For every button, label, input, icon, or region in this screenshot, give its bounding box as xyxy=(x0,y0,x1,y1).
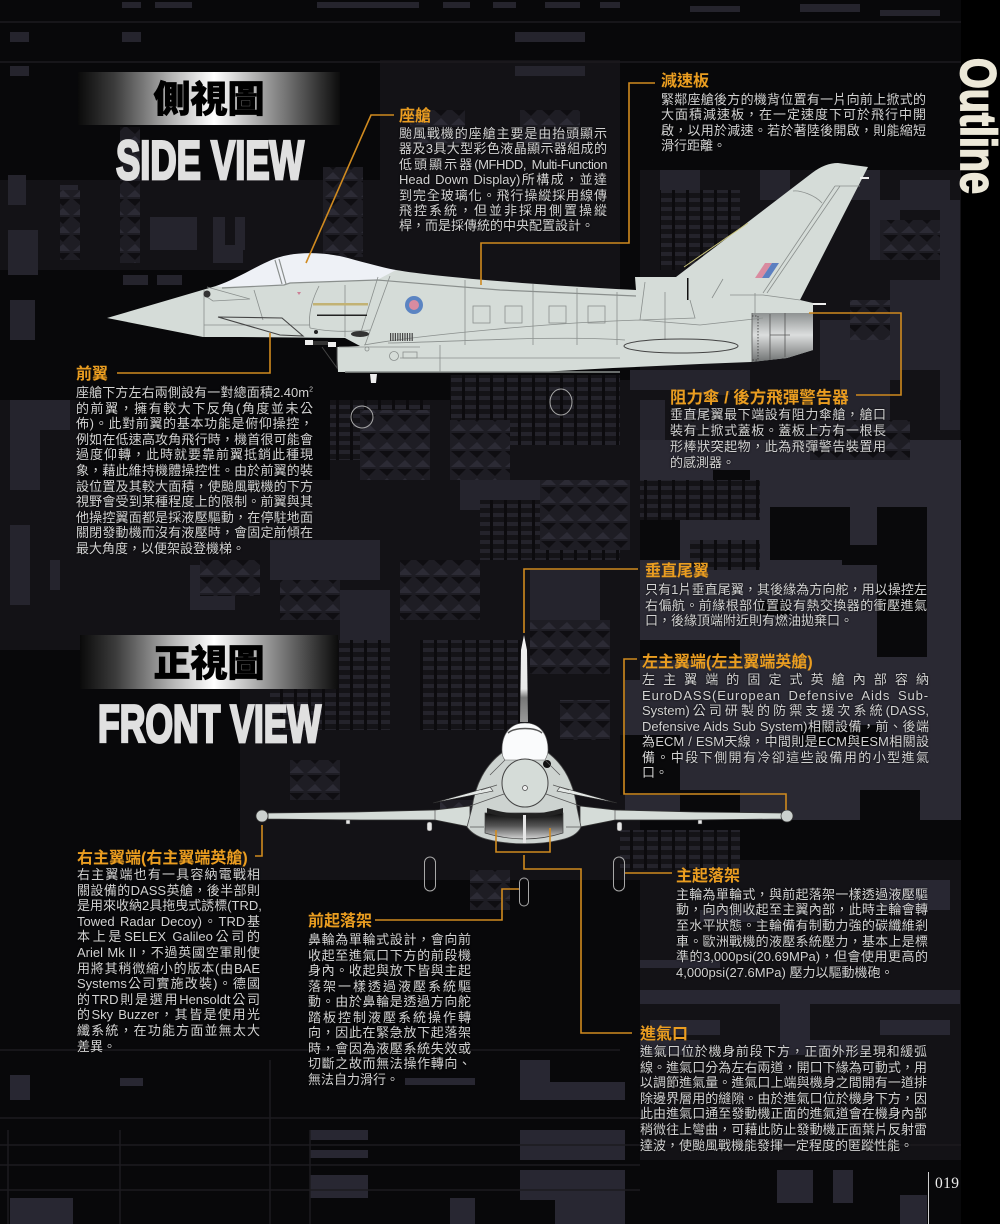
front view chinese title: 正視圖 xyxy=(154,633,264,687)
intake xyxy=(485,808,563,843)
text: cockpit: Head Down Display)所構成，並達 xyxy=(399,172,607,187)
text: cockpit: 桿，而是採傳統的中央配置設計。 xyxy=(399,218,594,233)
text: nose gear: 鼻輪為單輪式設計，會向前 xyxy=(308,932,471,947)
text: cockpit: 低頭顯示器(MFHDD, Multi-Function xyxy=(399,157,607,172)
side view title banner xyxy=(82,72,338,191)
text: main gear: 4,000psi(27.6MPa) 壓力以驅動機砲。 xyxy=(676,965,893,980)
panel: canard xyxy=(76,365,313,556)
text: canard: 例如在低速高攻角飛行時，機首很可能會 xyxy=(76,432,313,447)
text: nose gear: 收起至進氣口下方的前段機 xyxy=(308,948,471,962)
text: right wing tip: 差異。 xyxy=(77,1039,116,1054)
text: intake: 稍微往上彎曲，可藉此防止發動機正面葉片反射雷 xyxy=(640,1122,927,1137)
fin flash xyxy=(755,263,779,278)
side view english title: SIDE VIEW xyxy=(116,129,304,191)
text: main gear: 主輪為單輪式，與前起落架一樣透過液壓驅 xyxy=(676,886,928,902)
front view jet illustration xyxy=(256,635,793,844)
text: left wing tip: 備。中段下側開有冷卻這些設備用的小型進氣 xyxy=(642,750,929,764)
text: intake: 線。進氣口分為左右兩道，開口下緣為可動式，用 xyxy=(640,1060,927,1075)
leader: drag chute xyxy=(809,313,901,395)
panel: airbrake xyxy=(661,72,926,153)
text: main gear: 準的3,000psi(20.69MPa)，但會使用更高的 xyxy=(676,949,928,964)
text: vertical fin xyxy=(645,582,927,628)
text: main gear: 至水平狀態。主輪備有制動力強的碳纖維剎 xyxy=(676,918,928,933)
leader: right wing tip xyxy=(255,825,262,856)
fuselage and fin xyxy=(107,163,868,372)
text: canard: 視野會受到某種程度上的限制。前翼與其 xyxy=(76,494,313,509)
text: intake: 進氣口位於機身前段下方，正面外形呈現和緩弧 xyxy=(640,1044,927,1059)
text: right wing tip: 的TRD則是選用Hensoldt公司 xyxy=(77,992,260,1007)
heading: main gear: 主起落架 xyxy=(676,868,740,885)
text: canard: 關閉發動機而沒有液壓時，會固定前傾在 xyxy=(76,525,313,540)
text: intake: 達波，使颱風戰機能發揮一定程度的匿蹤性能。 xyxy=(640,1138,913,1153)
text: nose gear: 時，會因為液壓系統失效或 xyxy=(308,1040,471,1056)
pylons xyxy=(346,820,702,831)
page number: 019 xyxy=(935,1175,959,1192)
text: nose gear: 無法自力滑行。 xyxy=(308,1072,399,1086)
leader: main gear xyxy=(625,872,672,874)
text: canard: 設位置及其較大面積，使颱風戰機的下方 xyxy=(76,479,313,494)
heading: cockpit: 座艙 xyxy=(399,108,431,125)
leader: intake bracket xyxy=(496,828,550,852)
text: drag chute: 的感測器。 xyxy=(670,455,735,470)
text: right wing tip xyxy=(77,867,262,1054)
text: nose gear: 身內。收起與放下皆與主起 xyxy=(308,963,471,978)
left wing xyxy=(268,806,470,827)
text: airbrake: 滑行距離。 xyxy=(661,138,726,153)
text: canard: 過度仰轉，此時就要靠前翼抵銷此種現 xyxy=(76,447,313,462)
leader: canopy xyxy=(306,115,394,263)
text: nose gear: 向，因此在緊急放下起落架 xyxy=(308,1025,471,1040)
text: nose gear: 落架一樣透過液壓系統驅 xyxy=(308,978,471,994)
right wing xyxy=(580,806,782,827)
text: main gear: 動，向內側收起至主翼內部，此時主輪會轉 xyxy=(676,902,928,917)
text: left wing tip: EuroDASS(European Defensive Aids Sub- xyxy=(642,688,929,702)
panel: left wing tip xyxy=(642,653,929,780)
heading: nose gear: 前起落架 xyxy=(308,913,372,930)
text: right wing tip: 關設備的DASS英艙，後半部則 xyxy=(77,883,260,898)
leader: intake xyxy=(524,855,632,1033)
fuselage front xyxy=(467,752,581,844)
text: vertical fin: 右偏航。前緣根部位置設有熱交換器的衝壓進氣 xyxy=(645,598,927,612)
text: drag chute xyxy=(670,407,886,470)
lower blocks xyxy=(10,880,960,1224)
heading: canard: 前翼 xyxy=(76,366,108,383)
text: intake: 除邊界層用的縫隙。由於進氣口位於機身下方，因 xyxy=(640,1091,927,1106)
wing tip pods xyxy=(256,810,793,822)
right mid gray field xyxy=(625,440,961,820)
heading: airbrake: 減速板 xyxy=(661,73,709,90)
text: right wing tip: 用將其稍微縮小的版本(由BAE xyxy=(77,961,260,976)
panel: drag chute and missile warner xyxy=(670,388,886,470)
text: canard: 的前翼，擁有較大下反角(角度並未公 xyxy=(76,401,313,416)
panel: cockpit xyxy=(399,107,607,233)
text: left wing tip: 口。 xyxy=(642,765,668,780)
heading: right wing tip: 右主翼端(右主翼端英艙) xyxy=(77,850,248,867)
text: intake: 此由進氣口通至發動機正面的進氣道會在機身內部 xyxy=(640,1106,927,1121)
text: right wing tip: Systems公司實施改裝)。德國 xyxy=(77,976,260,991)
text: right wing tip: 纖系統，在功能方面並無太大 xyxy=(77,1023,260,1038)
text: left wing tip: 為ECM / ESM天線，中間則是ECM與ESM相關設 xyxy=(642,734,929,749)
text: right wing tip: Ariel Mk II，不過英國空軍則使 xyxy=(77,945,260,960)
leader: vertical fin xyxy=(524,569,638,633)
panel: intake xyxy=(640,1025,927,1153)
panel: nose gear xyxy=(308,912,471,1086)
text: cockpit xyxy=(399,126,607,233)
text: canard xyxy=(76,385,313,556)
text: nose gear: 踏板控制液壓系統操作轉 xyxy=(308,1010,471,1024)
leader: left wing tip xyxy=(624,659,786,810)
text: nose gear xyxy=(308,932,471,1086)
roundel xyxy=(405,296,423,314)
panel: main gear xyxy=(676,867,928,980)
text: right wing tip: 是用來收納2具拖曳式誘標(TRD, xyxy=(77,898,262,913)
text: canard: 佈)。此對前翼的基本功能是俯仰操控， xyxy=(76,416,313,431)
fuselage markings xyxy=(204,177,869,383)
leader: nose gear xyxy=(375,889,519,920)
text: nose gear: 切斷之故而無法操作轉向、 xyxy=(308,1056,471,1071)
text: canard: 座艙下方左右兩側設有一對總面積2.40m2 xyxy=(76,385,313,400)
text: right wing tip: Towed Radar Decoy)。TRD基 xyxy=(77,914,260,929)
side view chinese title: 側視圖 xyxy=(154,69,264,123)
text: cockpit: 到完全玻璃化。飛行操縱採用線傳 xyxy=(399,188,607,203)
heading: drag chute: 阻力傘 / 後方飛彈警告器 xyxy=(670,389,849,407)
canopy xyxy=(502,723,548,760)
text: main gear: 車。歐洲戰機的液壓系統壓力，基本上是標 xyxy=(676,934,928,949)
text: main gear xyxy=(676,886,928,980)
text: intake xyxy=(640,1044,927,1153)
text: right wing tip: 本上是SELEX Galileo公司的 xyxy=(77,929,260,944)
text: vertical fin: 口，後緣頂端附近則有燃油拋棄口。 xyxy=(645,613,853,628)
text: nose gear: 動。由於鼻輪是透過方向舵 xyxy=(308,994,471,1009)
text: canard: 他操控翼面都是採液壓驅動，在停駐地面 xyxy=(76,510,313,525)
text: drag chute: 垂直尾翼最下端設有阻力傘艙，艙口 xyxy=(670,407,886,422)
page number xyxy=(928,1172,962,1224)
canopy xyxy=(216,253,396,287)
text: left wing tip: Defensive Aids Sub System)相關設備，前、後端 xyxy=(642,718,929,734)
heading: left wing tip: 左主翼端(左主翼端英艙) xyxy=(642,654,813,671)
text: canard: 象，藉此維持機體操控性。由於前翼的裝 xyxy=(76,463,313,478)
canards xyxy=(433,787,617,803)
radome xyxy=(502,759,548,807)
vertical fin xyxy=(520,635,528,722)
heading: vertical fin: 垂直尾翼 xyxy=(645,563,709,580)
panel: vertical fin xyxy=(645,562,927,628)
text: airbrake: 啟，以用於減速。若於著陸後開啟，則能縮短 xyxy=(661,123,926,138)
panel details xyxy=(435,760,615,827)
text: airbrake: 緊鄰座艙後方的機背位置有一片向前上掀式的 xyxy=(661,92,926,107)
text: left wing tip: 左主翼端的固定式英艙內部容納 xyxy=(642,672,929,687)
text: airbrake xyxy=(661,92,926,153)
panel: right wing tip xyxy=(77,849,262,1054)
heading: intake: 進氣口 xyxy=(640,1026,688,1043)
text: left wing tip: System)公司研製的防禦支援次系統(DASS, xyxy=(642,703,929,718)
text: cockpit: 器及3具大型彩色液晶顯示器組成的 xyxy=(399,141,607,156)
leader: canard xyxy=(117,333,270,373)
panel lines xyxy=(204,186,860,372)
text: canard: 最大角度，以便架設登機梯。 xyxy=(76,541,245,556)
leader: airbrake xyxy=(481,83,655,285)
text: left wing tip xyxy=(642,672,929,780)
text: cockpit: 颱風戰機的座艙主要是由抬頭顯示 xyxy=(399,126,607,141)
engine nozzle xyxy=(752,313,813,362)
text: intake: 以調節進氣量。進氣口上端與機身之間開有一道排 xyxy=(640,1075,927,1090)
side view jet illustration xyxy=(107,163,869,383)
text: drag chute: 裝有上掀式蓋板。蓋板上方有一根長 xyxy=(670,423,886,438)
landing gear outlines and circles xyxy=(350,388,625,906)
text: right wing tip: 的Sky Buzzer，其皆是使用光 xyxy=(77,1007,260,1022)
text: vertical fin: 只有1片垂直尾翼，其後緣為方向舵，用以操控左 xyxy=(645,582,927,597)
text: drag chute: 形棒狀突起物，此為飛彈警告裝置用 xyxy=(670,439,886,454)
front view title banner xyxy=(80,635,338,754)
text: cockpit: 飛控系統，但並非採用側置操縱 xyxy=(399,203,607,218)
sensor dot xyxy=(543,760,551,768)
text: right wing tip: 右主翼端也有一具容納電戰相 xyxy=(77,867,260,882)
text: airbrake: 大面積減速板，在一定速度下可於飛行中開 xyxy=(661,107,926,122)
